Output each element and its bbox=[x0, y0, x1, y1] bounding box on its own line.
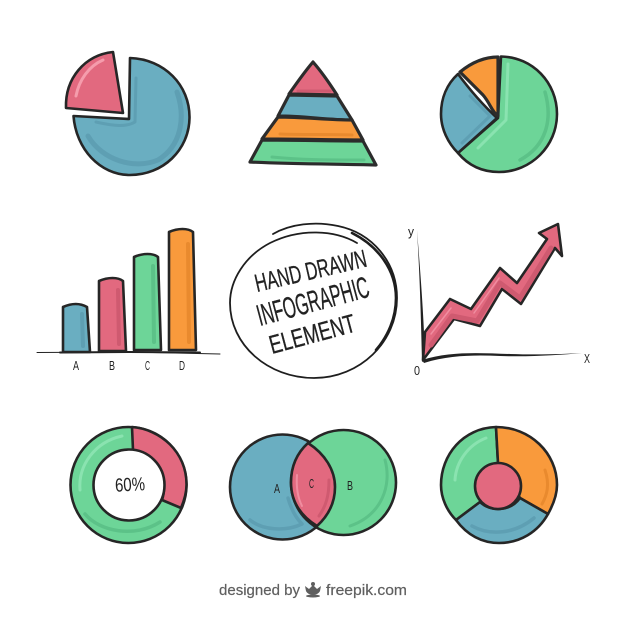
pyramid blue tier bbox=[278, 95, 352, 120]
bar chart bbox=[37, 229, 220, 373]
title text: INFOGRAPHIC bbox=[253, 271, 373, 333]
title text: HAND DRAWN bbox=[252, 245, 369, 298]
venn circle B bbox=[291, 430, 396, 535]
donut chart bbox=[70, 427, 187, 543]
pie orange segment bbox=[460, 57, 498, 116]
bar labels: B bbox=[109, 358, 115, 373]
ring orange segment bbox=[496, 427, 557, 514]
axis labels bbox=[408, 224, 590, 378]
ring segmented chart bbox=[441, 427, 557, 543]
venn overlap C bbox=[291, 443, 335, 526]
donut percentage: 60% bbox=[114, 474, 146, 497]
venn diagram bbox=[230, 430, 396, 540]
venn labels: A bbox=[274, 481, 280, 496]
footer credit bbox=[219, 582, 407, 599]
pie green segment bbox=[458, 56, 557, 172]
bar labels bbox=[73, 358, 185, 373]
donut pink segment bbox=[132, 427, 187, 508]
ring blue segment bbox=[456, 498, 548, 543]
pyramid pink tier bbox=[289, 62, 337, 95]
icon: freepik crown bbox=[305, 582, 321, 598]
ring green segment bbox=[441, 427, 498, 520]
baseline bbox=[37, 352, 220, 354]
line arrow chart bbox=[408, 224, 590, 378]
pie blue segment bbox=[441, 74, 497, 153]
axis labels: y bbox=[408, 224, 414, 239]
ring center circle bbox=[475, 463, 521, 509]
title text: ELEMENT bbox=[266, 308, 359, 360]
bar B bbox=[99, 278, 126, 351]
pyramid orange tier bbox=[262, 117, 363, 140]
venn labels bbox=[274, 476, 353, 496]
bar labels: C bbox=[145, 358, 150, 373]
pink slice bbox=[66, 52, 123, 113]
donut hole bbox=[94, 450, 164, 520]
title text bbox=[252, 245, 373, 360]
bar labels: D bbox=[179, 358, 185, 373]
axes bbox=[417, 230, 582, 363]
bar A bbox=[63, 304, 90, 352]
rising arrow bbox=[423, 224, 562, 360]
hand drawn circle title bbox=[230, 224, 397, 378]
axis labels: 0 bbox=[414, 363, 420, 378]
pyramid green tier bbox=[250, 140, 376, 165]
sketched circle bbox=[230, 224, 397, 378]
axis labels: X bbox=[584, 351, 590, 366]
venn labels: C bbox=[309, 476, 314, 491]
footer credit: designed by bbox=[219, 583, 301, 599]
segmented pie chart bbox=[441, 56, 557, 172]
blue pie body bbox=[74, 58, 190, 175]
bar D bbox=[169, 229, 196, 350]
venn circle A bbox=[230, 434, 335, 540]
pie chart with pulled-out slice bbox=[66, 52, 190, 175]
pyramid chart bbox=[250, 62, 376, 165]
bar labels: A bbox=[73, 358, 79, 373]
bar C bbox=[134, 254, 161, 350]
donut green ring bbox=[70, 427, 186, 543]
venn labels: B bbox=[347, 478, 353, 493]
footer credit: freepik.com bbox=[326, 583, 407, 599]
